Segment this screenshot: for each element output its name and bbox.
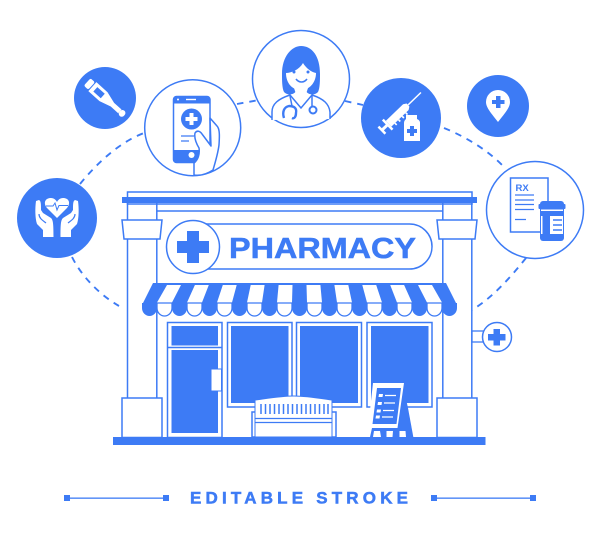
- ground line: [113, 437, 486, 445]
- pharmacy building: [113, 192, 512, 445]
- left handle line: [64, 495, 169, 501]
- icon: phone app badge: [145, 80, 241, 176]
- right pillar: [437, 203, 477, 438]
- A-frame menu board: [367, 383, 414, 438]
- icon: syringe badge: [361, 78, 441, 158]
- right handle line: [431, 495, 536, 501]
- icon: thermometer badge: [74, 67, 136, 129]
- left pillar: [122, 203, 162, 438]
- shop sign: [166, 220, 432, 274]
- dashed connection ring: [72, 100, 526, 310]
- footer label: [64, 488, 536, 508]
- shop sign: PHARMACY: [229, 233, 416, 265]
- roof and cornice: [122, 192, 477, 211]
- hanging cross sign: [472, 322, 512, 352]
- window middle: [296, 322, 362, 407]
- door: [168, 322, 222, 438]
- icon: location pin badge: [467, 75, 529, 137]
- awning: [142, 283, 457, 316]
- icon: prescription badge: RX: [516, 183, 529, 194]
- bench: [252, 396, 336, 437]
- window right: [367, 322, 432, 407]
- icon: doctor badge: [252, 30, 350, 128]
- caption: EDITABLE STROKE: [190, 488, 408, 508]
- window left: [228, 322, 292, 407]
- icon: prescription badge: [486, 162, 584, 258]
- icon: hands holding heart badge: [17, 178, 97, 258]
